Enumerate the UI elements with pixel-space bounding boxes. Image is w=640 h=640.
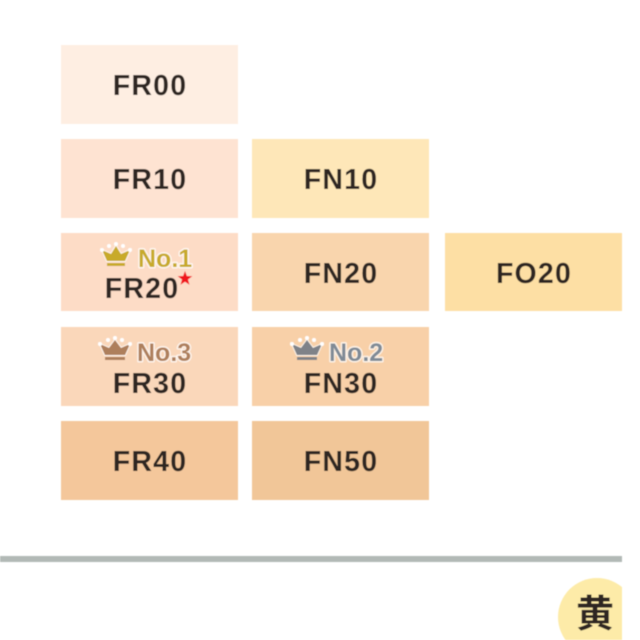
swatch: FR30 with No.3 rank: [61, 327, 238, 406]
icon: bronze crown: [98, 336, 132, 360]
swatch: FN10: FN10: [304, 164, 378, 196]
swatch: FR40: FR40: [113, 446, 187, 478]
rank label: No.2: No.2: [329, 339, 383, 367]
badge: yellow category: [558, 578, 622, 640]
swatch: FN30 with No.2 rank: [252, 327, 429, 406]
rank label: No.3: No.3: [137, 339, 191, 367]
swatch: FN30 with No.2 rank: FN30: [304, 368, 378, 400]
swatch: FR10: [61, 139, 238, 218]
swatch: FN50: [252, 421, 429, 500]
swatch: FO20: [445, 233, 622, 311]
badge: yellow category: 黄: [576, 594, 614, 636]
swatch: FN20: [252, 233, 429, 311]
swatch: FN10: [252, 139, 429, 218]
swatch: FR30 with No.3 rank: FR30: [113, 368, 187, 400]
swatch: FR20 with No.1 rank: [61, 233, 238, 311]
swatch: FR20 with No.1 rank: FR20: [105, 273, 179, 305]
swatch: FO20: FO20: [496, 258, 572, 290]
swatch: FR10: FR10: [113, 164, 187, 196]
divider line: [0, 556, 622, 562]
swatch: FR00: [61, 45, 238, 124]
swatch: FR40: [61, 421, 238, 500]
icon: silver crown: [290, 336, 324, 360]
rank label: No.1: No.1: [138, 245, 192, 273]
swatch: FR00: FR00: [113, 70, 187, 102]
icon: gold crown: [100, 242, 132, 266]
swatch: FN50: FN50: [304, 446, 378, 478]
swatch: FN20: FN20: [304, 258, 378, 290]
icon: red star: [178, 271, 192, 285]
